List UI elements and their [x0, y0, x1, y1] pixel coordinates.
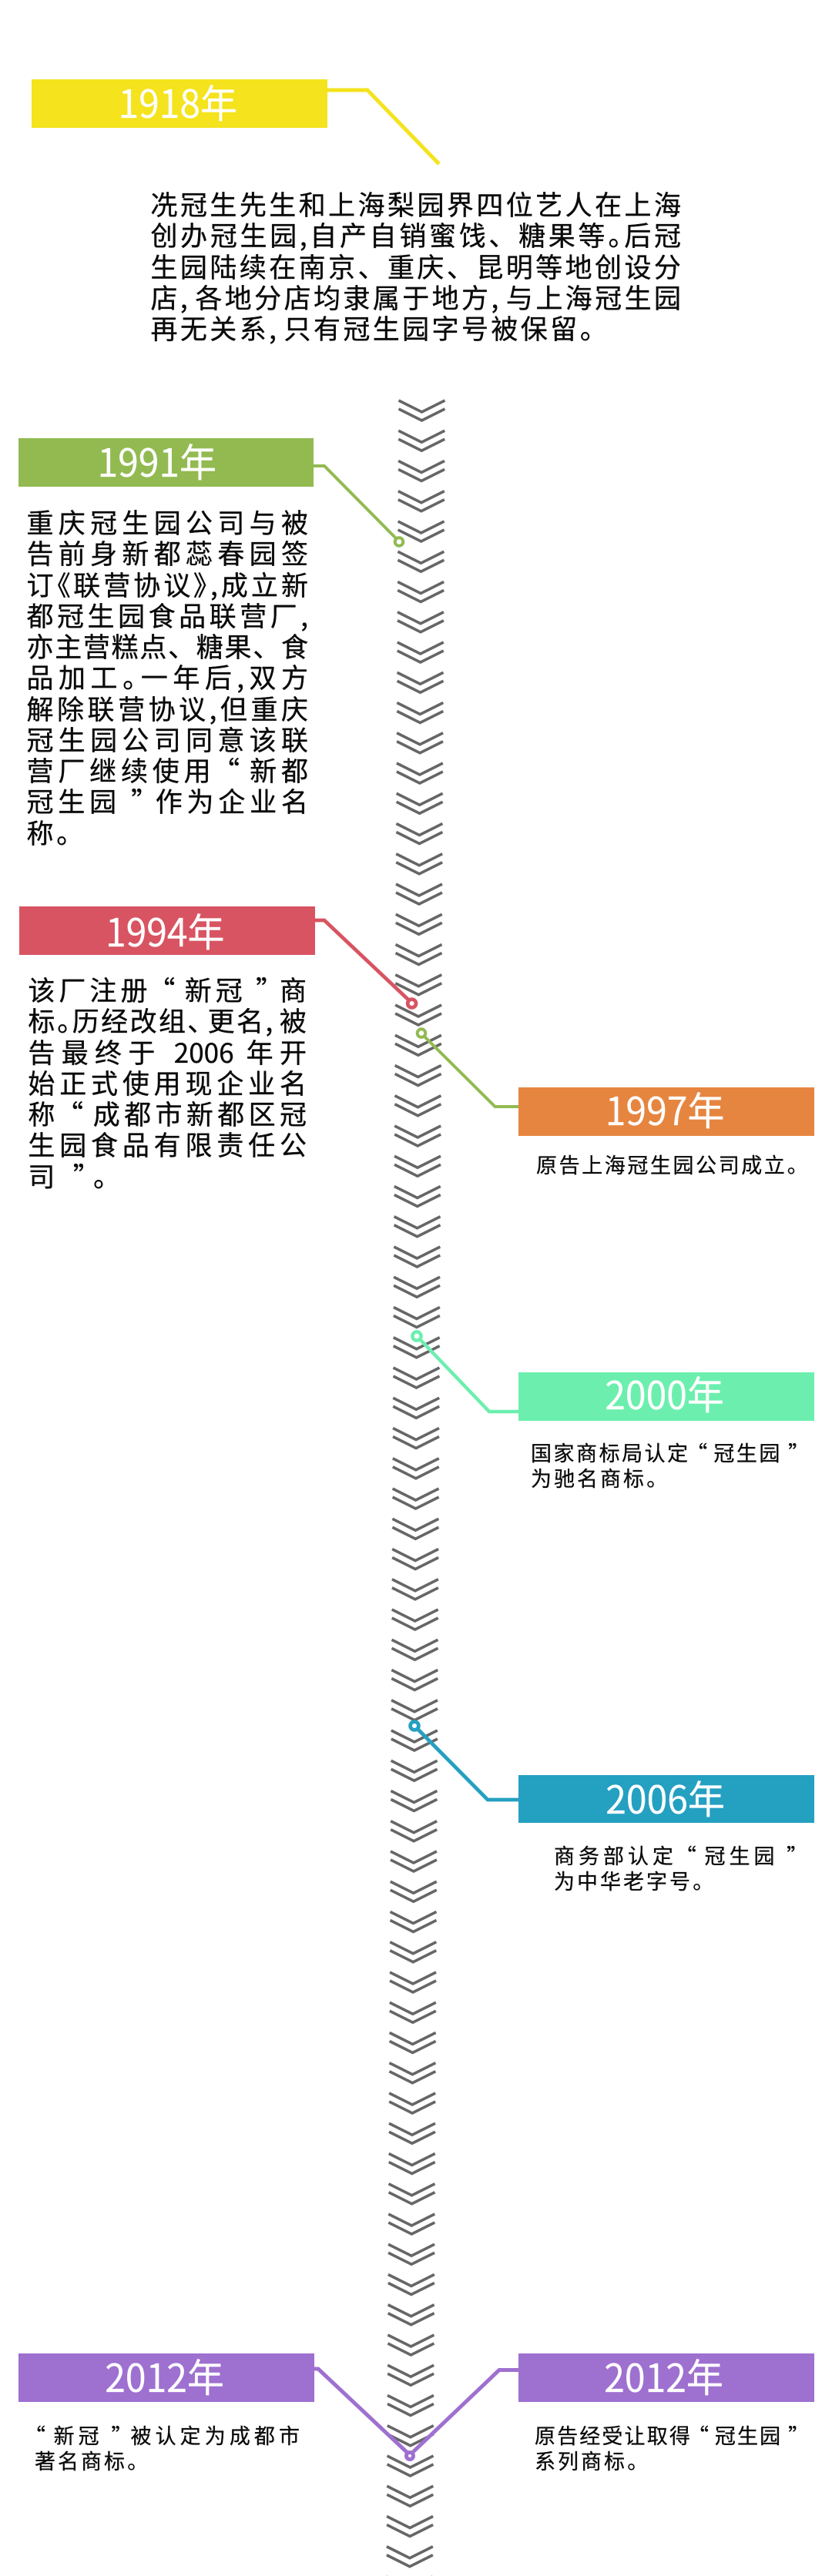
panel: 1997: [518, 1080, 814, 1179]
text: 1994: [28, 970, 307, 1195]
connector: 2000: [412, 1332, 518, 1412]
year bar: 1918: [32, 79, 327, 128]
text: 1991: 称。: [26, 812, 72, 852]
text: 1994: 告最终于 2006 年开: [28, 1032, 307, 1070]
text: 1994: 该厂注册 “ 新冠 ” 商: [28, 970, 307, 1009]
text: 1991: 都冠生园食品联营厂,: [26, 595, 308, 635]
year bar: 2006: [518, 1775, 814, 1823]
text: 1991: 告前身新都蕊春园签: [26, 533, 308, 572]
heading: 2012年 right: 2012年: [604, 2347, 723, 2403]
text: 2006: 为中华老字号。: [554, 1865, 705, 1894]
text: 1918: 冼冠生先生和上海梨园界四位艺人在上海: [151, 184, 681, 223]
text: 2012 left: “ 新冠 ” 被认定为成都市: [35, 2420, 300, 2450]
text: 1918: 生园陆续在南京、重庆、昆明等地创设分: [151, 246, 681, 285]
year bar: 1994: [19, 906, 314, 955]
connector: 2006: [411, 1722, 518, 1800]
text: 1991: 营厂继续使用 “ 新都: [26, 750, 308, 789]
heading: 1991年: 1991年: [97, 431, 216, 488]
text: 1991: 冠生园公司同意该联: [26, 719, 308, 759]
panel: 2012 right: [518, 2347, 814, 2475]
connector: 1991: [314, 466, 403, 546]
text: 1991: 订《联营协议》,成立新: [26, 564, 308, 604]
panel: 2000: [518, 1364, 814, 1492]
panel: 2012 left: [18, 2347, 314, 2475]
heading: 2000年: 2000年: [605, 1364, 724, 1421]
heading: 1994年: 1994年: [106, 901, 225, 957]
text: 1994: 生园食品有限责任公: [28, 1124, 307, 1164]
connector: 1997: [418, 1029, 518, 1107]
year bar: 2012 right: [518, 2353, 814, 2402]
text: 1994: 称 “ 成都市新都区冠: [28, 1094, 307, 1133]
year bar: 2000: [518, 1372, 814, 1421]
connector: 2012 right: [407, 2370, 518, 2460]
text: 2000: [531, 1437, 799, 1492]
panel: 2006: [518, 1768, 814, 1894]
text: 1994: 司 ”。: [28, 1155, 112, 1195]
text: 1918: 再无关系,只有冠生园字号被保留。: [151, 308, 595, 347]
text: 1918: [151, 184, 681, 347]
text: 2000: 为驰名商标。: [531, 1462, 659, 1492]
text: 1991: 重庆冠生园公司与被: [26, 502, 308, 541]
year bar: 2012 left: [18, 2353, 314, 2402]
text: 2012 right: 系列商标。: [535, 2444, 639, 2475]
panel: 1991: [18, 431, 314, 852]
connector: 2012 left: [314, 2369, 408, 2454]
heading: 1918年: 1918年: [119, 72, 237, 129]
year bar: 1997: [518, 1087, 814, 1135]
text: 1997: 原告上海冠生园公司成立。: [536, 1149, 797, 1179]
heading: 1997年: 1997年: [606, 1080, 724, 1137]
text: 1994: 标。历经改组、更名,被: [28, 1000, 307, 1040]
text: 1991: [26, 502, 308, 852]
text: 2006: [554, 1840, 797, 1894]
text: 2012 right: 原告经受让取得 “ 冠生园 ”: [535, 2420, 799, 2450]
text: 1918: 店,各地分店均隶属于地方,与上海冠生园: [151, 277, 681, 317]
text: 1918: 创办冠生园,自产自销蜜饯、糖果等。后冠: [151, 215, 681, 254]
connector: 1994: [314, 920, 416, 1007]
panel: 1918: [32, 72, 681, 347]
panel: 1994: [19, 901, 315, 1195]
text: 2012 left: 著名商标。: [35, 2444, 139, 2475]
text: 2006: 商务部认定 “ 冠生园 ”: [554, 1840, 797, 1870]
text: 1991: 亦主营糕点、糖果、食: [26, 626, 308, 665]
text: 1991: 冠生园 ” 作为企业名: [26, 781, 308, 820]
text: 2012 right: [535, 2420, 799, 2475]
text: 1991: 品加工。一年后,双方: [26, 657, 308, 696]
text: 2000: 国家商标局认定 “ 冠生园 ”: [531, 1437, 799, 1467]
heading: 2012年 left: 2012年: [105, 2347, 224, 2403]
text: 1991: 解除联营协议,但重庆: [26, 688, 308, 727]
text: 2012 left: [35, 2420, 300, 2475]
heading: 2006年: 2006年: [606, 1768, 725, 1825]
year bar: 1991: [18, 438, 314, 487]
chevron spine: [387, 400, 445, 2576]
text: 1994: 始正式使用现企业名: [28, 1063, 307, 1102]
connector: 1918: [327, 90, 439, 164]
